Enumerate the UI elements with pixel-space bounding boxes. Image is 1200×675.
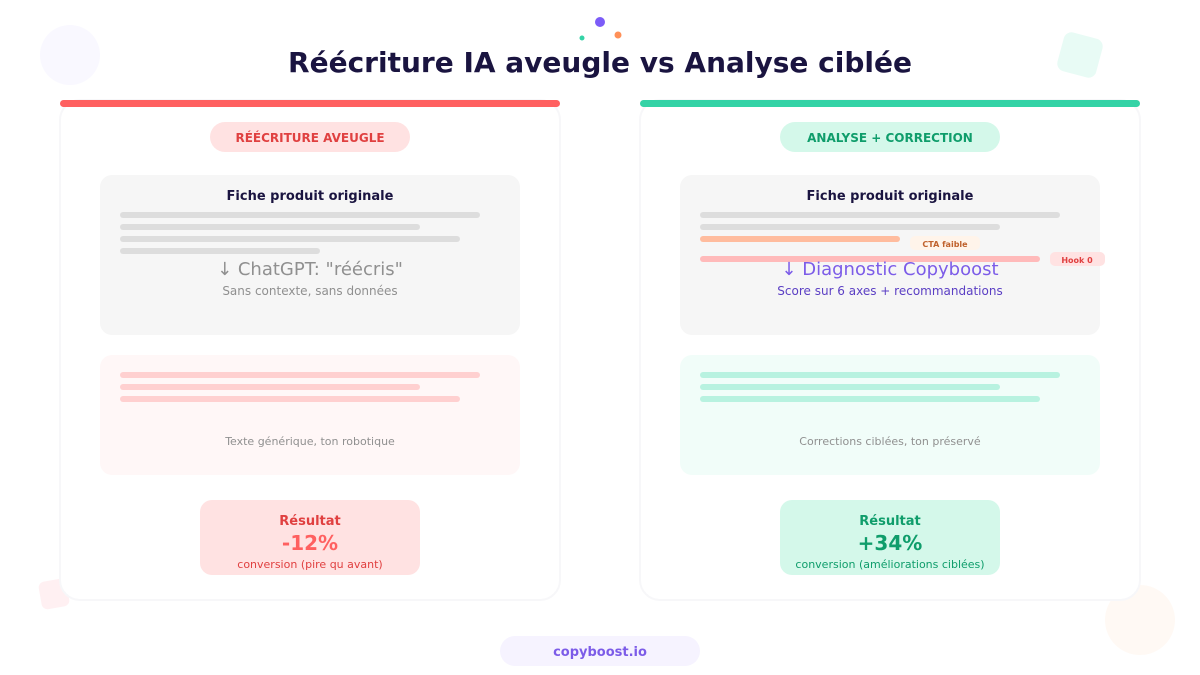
result box +34% [780,500,1000,575]
box heading: Fiche produit originale [807,189,974,204]
tag: CTA faible: CTA faible [922,240,968,249]
badge: analyse + correction: ANALYSE + CORRECTION [807,131,973,145]
decorative circle top left [40,25,100,85]
corrected output box [680,355,1100,475]
badge: analyse + correction [780,122,1000,152]
placeholder text lines [700,212,1060,230]
step caption: Score sur 6 axes + recommandations [777,284,1003,298]
tag: Hook 0: Hook 0 [1061,256,1093,265]
badge: réécriture aveugle: RÉÉCRITURE AVEUGLE [235,130,385,145]
panel: réécriture aveugle [60,100,560,600]
rewritten output box [100,355,520,475]
output lines [700,372,1060,402]
green top bar [640,100,1140,107]
footer: copyboost.io pill: copyboost.io [553,645,647,660]
original product sheet box [100,175,520,335]
panel: analyse + correction [640,100,1140,600]
tag: Hook 0 [1050,252,1105,266]
card background [60,100,560,600]
result box +34%: +34% [858,531,922,555]
box heading: Fiche produit originale [227,189,394,204]
card background [640,100,1140,600]
badge: réécriture aveugle [210,122,410,152]
diagnostic step label: ↓ Diagnostic Copyboost [781,259,999,280]
original product sheet box [680,175,1105,335]
decorative square bottom left [38,578,70,610]
title: Réécriture IA aveugle vs Analyse ciblée [288,46,912,79]
decorative square top right [1056,31,1104,79]
output lines [120,372,480,402]
decorative circle bottom right [1105,585,1175,655]
output caption: Texte générique, ton robotique [224,435,395,448]
ChatGPT step label: ↓ ChatGPT: "réécris" [217,259,403,280]
step caption: Sans contexte, sans données [222,284,398,298]
weak CTA highlighted line [700,236,900,242]
result box +34%: conversion (améliorations ciblées) [795,558,985,571]
red top bar [60,100,560,107]
decorative dots above title [580,17,622,40]
output caption: Corrections ciblées, ton préservé [799,435,981,448]
placeholder text lines [120,212,480,254]
result box -12%: -12% [282,531,338,555]
tag: CTA faible [910,236,980,250]
footer: copyboost.io pill [500,636,700,666]
hook highlighted line [700,256,1040,262]
result box -12% [200,500,420,575]
result box +34%: Résultat [859,514,921,529]
result box -12%: Résultat [279,514,341,529]
result box -12%: conversion (pire qu avant) [237,558,383,571]
